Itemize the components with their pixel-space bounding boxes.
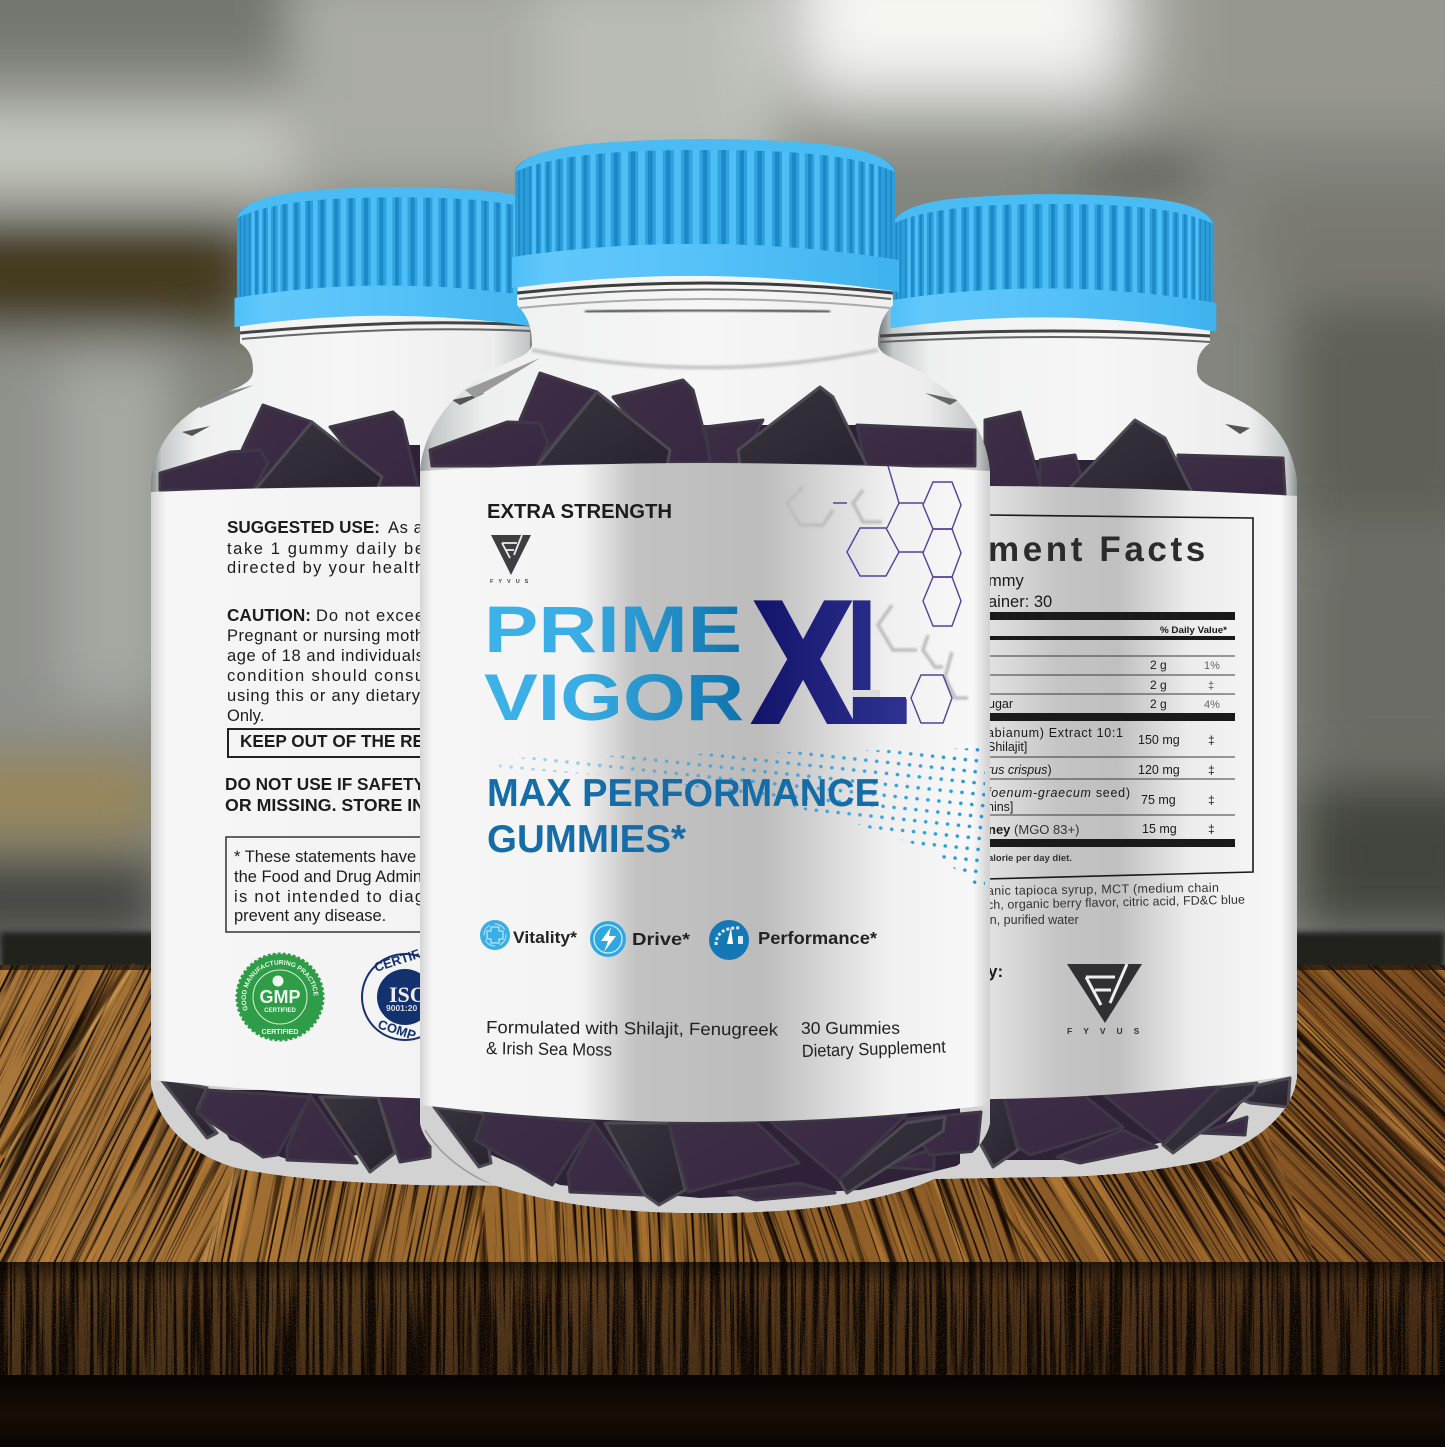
left label text: directed by your health [227, 559, 424, 577]
supplement facts panel: 150 mg [1138, 733, 1180, 747]
left bottle label [151, 487, 530, 1100]
bottle: center [415, 130, 995, 1220]
headline: max performance gummies: GUMMIES* [487, 818, 687, 861]
supplement facts panel: ‡ [1208, 680, 1214, 692]
supplement facts panel: abianum) Extract 10:1 [987, 726, 1123, 740]
left label text: condition should consu [227, 667, 424, 685]
center bottle jar [415, 265, 995, 1220]
left label text: As a [388, 519, 424, 537]
bottle: left [151, 187, 530, 1186]
icon: GMP badge: GOOD MANUFACTURING PRACTICE [241, 960, 318, 1011]
left label text: using this or any dietary [227, 687, 421, 705]
left label text: the Food and Drug Admin [234, 868, 422, 886]
icon: ISO badge: CERTIF [372, 946, 422, 975]
left bottle jar [150, 300, 540, 1190]
left label text: Do not excee [316, 607, 424, 625]
table front edge [0, 1262, 1445, 1375]
brand name: prime vigor: PRIME [484, 592, 742, 666]
icon: GMP badge: CERTIFIED [262, 1029, 298, 1036]
supplement facts panel: 120 mg [1138, 763, 1180, 777]
supplement facts panel: 1% [1204, 660, 1220, 672]
wooden table [0, 965, 1445, 1447]
supplement facts panel: ainer: 30 [988, 593, 1052, 611]
right bottle cap [890, 186, 1216, 332]
hexagon decoration [787, 466, 968, 723]
left label text: Pregnant or nursing moth [227, 627, 424, 645]
icon: FYVUS logo back [1067, 964, 1150, 1036]
benefit: vitality: Vitality* [513, 928, 577, 947]
center bottle cap [512, 130, 899, 292]
left label text: SUGGESTED USE: [227, 517, 380, 537]
supplement facts panel: rus crispus) [987, 763, 1052, 777]
right bottle label [880, 486, 1297, 1099]
supplement facts panel: nins] [987, 800, 1013, 814]
supplement facts panel: ney (MGO 83+) [988, 822, 1079, 837]
supplement facts panel: ‡ [1208, 763, 1215, 777]
headline: max performance gummies: MAX PERFORMANCE [487, 772, 880, 815]
brand name: XL: L [848, 567, 908, 758]
text: formulated with: & Irish Sea Moss [486, 1038, 612, 1060]
supplement facts panel: ment Facts [988, 530, 1209, 569]
supplement facts panel: y: [988, 962, 1003, 981]
left label text: DO NOT USE IF SAFETY [225, 774, 425, 794]
icon: ISO badge [362, 946, 448, 1043]
icon: GMP badge: GMP [259, 987, 301, 1007]
supplement facts panel: 15 mg [1142, 822, 1177, 836]
icon: ISO badge: ISO [389, 982, 427, 1007]
supplement facts panel: ‡ [1208, 793, 1215, 807]
brand name: XL: X [754, 567, 852, 758]
supplement facts panel: 2 g [1150, 658, 1167, 672]
headline: max performance gummies [487, 772, 880, 861]
icon: ISO badge: 9001:20 [386, 1003, 417, 1013]
icon: FYVUS logo front [490, 535, 533, 585]
benefit: vitality [480, 920, 577, 950]
left label text [225, 517, 468, 932]
bottle: right [880, 186, 1300, 1190]
icon: ISO badge: COMP [376, 1017, 418, 1043]
left label text: * These statements have [234, 848, 416, 866]
text: count and type: Dietary Supplement [801, 1036, 946, 1061]
supplement facts panel: Shilajit] [987, 740, 1027, 754]
supplement facts panel: ugar [988, 697, 1013, 711]
left label text: take 1 gummy daily be [227, 540, 424, 558]
left label text: OR MISSING. STORE IN [225, 795, 425, 815]
right bottle jar [880, 300, 1300, 1190]
icon: GMP badge [236, 952, 324, 1042]
blurred room background [0, 0, 1445, 970]
supplement facts panel: alorie per day diet. [988, 853, 1072, 864]
left label text: age of 18 and individuals [227, 647, 424, 665]
supplement facts panel: 75 mg [1141, 793, 1176, 807]
dark floor [0, 1375, 1445, 1447]
icon: FYVUS logo front: FYVUS [490, 579, 533, 585]
benefit: performance: Performance* [758, 928, 877, 948]
left label text: KEEP OUT OF THE RE [240, 731, 424, 751]
benefit: performance [709, 920, 877, 960]
text: formulated with: Formulated with Shilajit, Fenugreek [486, 1017, 778, 1040]
supplement facts panel: 4% [1204, 699, 1220, 711]
icon: FYVUS logo back: FYVUS [1067, 1026, 1150, 1036]
supplement facts panel: foenum-graecum seed) [987, 786, 1130, 800]
supplement facts panel [985, 515, 1253, 981]
supplement facts panel: in, purified water [987, 913, 1079, 927]
left label text: CAUTION: [227, 605, 311, 625]
brand name: prime vigor [484, 592, 744, 734]
table top surface [0, 965, 1445, 1263]
supplement facts panel: 2 g [1150, 678, 1167, 692]
benefit: drive [590, 921, 690, 957]
center bottle label [420, 463, 990, 1122]
left bottle cap [234, 179, 560, 331]
supplement facts panel: 2 g [1150, 697, 1167, 711]
text: count and type [801, 1018, 946, 1061]
text: count and type: 30 Gummies [801, 1018, 900, 1038]
benefit: drive: Drive* [632, 929, 690, 949]
icon: GMP badge: CERTIFIED [264, 1008, 296, 1014]
supplement facts panel: mmy [988, 572, 1024, 590]
text: extra strength: EXTRA STRENGTH [487, 500, 672, 523]
left label text: prevent any disease. [234, 907, 386, 925]
left label text: Only. [227, 707, 264, 725]
supplement facts panel: anic tapioca syrup, MCT (medium chain [987, 881, 1219, 898]
left label text: is not intended to diag [234, 888, 424, 906]
supplement facts panel: % Daily Value* [1160, 625, 1228, 635]
halftone dots [495, 745, 990, 895]
supplement facts panel: ch, organic berry flavor, citric acid, FD&C blue [987, 893, 1245, 912]
supplement facts panel: ‡ [1208, 822, 1215, 836]
text: formulated with [486, 1017, 778, 1060]
brand name: prime vigor: VIGOR [484, 660, 744, 734]
supplement facts panel: ‡ [1208, 733, 1215, 747]
